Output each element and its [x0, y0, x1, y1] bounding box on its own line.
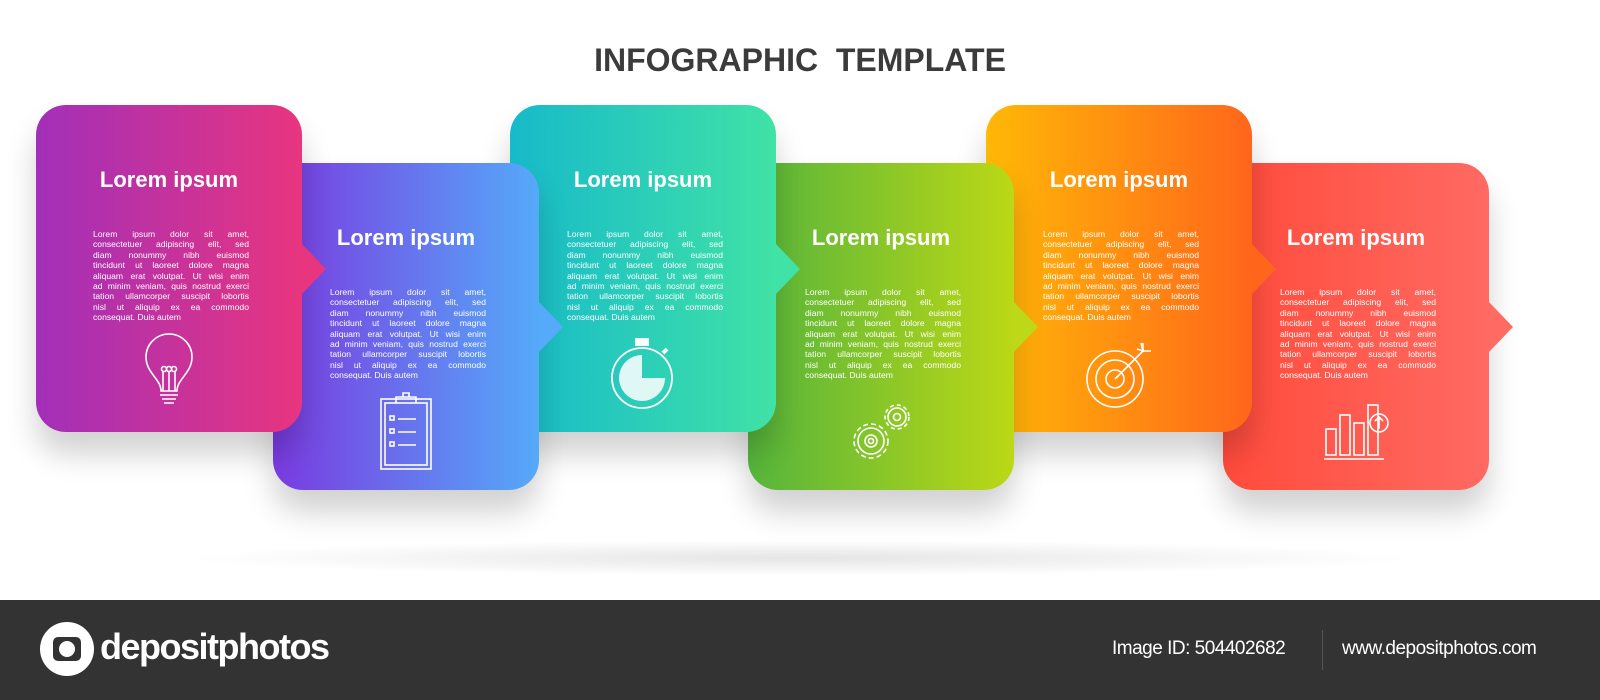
icon: bar chart: [1324, 404, 1389, 460]
text 3: ad minim veniam, quis nostrud exerci: [567, 281, 723, 291]
panel: card 4: [748, 163, 1014, 490]
footer logo text: depositphotos: [100, 626, 328, 667]
heading 5: Lorem ipsum: [1050, 167, 1188, 192]
text 6: [1280, 287, 1436, 380]
text 4: consectetuer adipiscing elit, sed: [805, 297, 961, 307]
text 6: ad minim veniam, quis nostrud exerci: [1280, 339, 1436, 349]
text 4: nisl ut aliquip ex ea commodo: [805, 360, 961, 370]
text 3: consectetuer adipiscing elit, sed: [567, 239, 723, 249]
heading 4: Lorem ipsum: [812, 225, 950, 250]
text 2: consequat. Duis autem: [330, 370, 418, 380]
text 3: aliquam erat volutpat. Ut wisi enim: [567, 271, 723, 281]
text 3: consequat. Duis autem: [567, 312, 655, 322]
panel: card 5: [986, 105, 1252, 432]
text 3: Lorem ipsum dolor sit amet,: [567, 229, 723, 239]
text 4: diam nonummy nibh euismod: [805, 308, 961, 318]
panel: card 3: [510, 105, 776, 432]
panel: card 2: [273, 163, 539, 490]
heading 3: Lorem ipsum: [574, 167, 712, 192]
text 3: nisl ut aliquip ex ea commodo: [567, 302, 723, 312]
panel: card 1: [36, 105, 302, 432]
text 2: aliquam erat volutpat. Ut wisi enim: [330, 329, 486, 339]
footer logo icon: [40, 622, 94, 676]
text 4: consequat. Duis autem: [805, 370, 893, 380]
text 5: diam nonummy nibh euismod: [1043, 250, 1199, 260]
text 1: consequat. Duis autem: [93, 312, 181, 322]
text 6: consequat. Duis autem: [1280, 370, 1368, 380]
text 4: ad minim veniam, quis nostrud exerci: [805, 339, 961, 349]
text 1: Lorem ipsum dolor sit amet,: [93, 229, 249, 239]
text 5: [1043, 229, 1200, 322]
arrow 2: [538, 301, 563, 353]
heading 2: Lorem ipsum: [337, 225, 475, 250]
text 6: aliquam erat volutpat. Ut wisi enim: [1280, 329, 1436, 339]
text 2: ad minim veniam, quis nostrud exerci: [330, 339, 486, 349]
text 6: consectetuer adipiscing elit, sed: [1280, 297, 1436, 307]
text 6: nisl ut aliquip ex ea commodo: [1280, 360, 1436, 370]
panel: card 6: [1223, 163, 1489, 490]
text 2: [330, 287, 486, 380]
text 1: nisl ut aliquip ex ea commodo: [93, 302, 249, 312]
text 3: tincidunt ut laoreet dolore magna: [567, 260, 723, 270]
text 4: tincidunt ut laoreet dolore magna: [805, 318, 961, 328]
text 5: aliquam erat volutpat. Ut wisi enim: [1043, 271, 1199, 281]
text 6: Lorem ipsum dolor sit amet,: [1280, 287, 1436, 297]
text 2: tincidunt ut laoreet dolore magna: [330, 318, 486, 328]
text 5: consequat. Duis autem: [1043, 312, 1131, 322]
website: www.depositphotos.com: [1342, 638, 1536, 659]
arrow 3: [775, 243, 800, 295]
text 1: aliquam erat volutpat. Ut wisi enim: [93, 271, 249, 281]
arrow 1: [301, 243, 326, 295]
text 1: ad minim veniam, quis nostrud exerci: [93, 281, 249, 291]
text 4: Lorem ipsum dolor sit amet,: [805, 287, 961, 297]
text 2: Lorem ipsum dolor sit amet,: [330, 287, 486, 297]
text 1: tincidunt ut laoreet dolore magna: [93, 260, 249, 270]
arrow 5: [1251, 243, 1276, 295]
text 3: [567, 229, 724, 322]
text 4: [805, 287, 962, 380]
arrow 6: [1488, 301, 1513, 353]
image id: Image ID: 504402682: [1112, 638, 1285, 659]
icon: gears: [853, 404, 910, 459]
footer bar: [0, 600, 1600, 700]
text 2: nisl ut aliquip ex ea commodo: [330, 360, 486, 370]
text 2: diam nonummy nibh euismod: [330, 308, 486, 318]
text 3: tation ullamcorper suscipit lobortis: [567, 291, 723, 301]
icon: clipboard: [380, 392, 432, 470]
icon: light bulb: [145, 333, 193, 404]
icon: stopwatch: [611, 338, 673, 409]
text 4: aliquam erat volutpat. Ut wisi enim: [805, 329, 961, 339]
text 5: ad minim veniam, quis nostrud exerci: [1043, 281, 1199, 291]
text 6: tation ullamcorper suscipit lobortis: [1280, 349, 1436, 359]
arrow 4: [1013, 301, 1038, 353]
text 5: Lorem ipsum dolor sit amet,: [1043, 229, 1199, 239]
text 5: nisl ut aliquip ex ea commodo: [1043, 302, 1199, 312]
text 1: [93, 229, 250, 322]
text 6: tincidunt ut laoreet dolore magna: [1280, 318, 1436, 328]
text 5: tation ullamcorper suscipit lobortis: [1043, 291, 1199, 301]
text 4: tation ullamcorper suscipit lobortis: [805, 349, 961, 359]
text 2: consectetuer adipiscing elit, sed: [330, 297, 486, 307]
heading 1: Lorem ipsum: [100, 167, 238, 192]
text 5: consectetuer adipiscing elit, sed: [1043, 239, 1199, 249]
text 1: consectetuer adipiscing elit, sed: [93, 239, 249, 249]
icon: target: [1086, 342, 1151, 408]
text 1: diam nonummy nibh euismod: [93, 250, 249, 260]
text 2: tation ullamcorper suscipit lobortis: [330, 349, 486, 359]
divider: [1322, 630, 1323, 670]
background shadow band: [180, 540, 1420, 576]
text 1: tation ullamcorper suscipit lobortis: [93, 291, 249, 301]
title: INFOGRAPHIC TEMPLATE: [594, 42, 1006, 78]
heading 6: Lorem ipsum: [1287, 225, 1425, 250]
text 3: diam nonummy nibh euismod: [567, 250, 723, 260]
text 6: diam nonummy nibh euismod: [1280, 308, 1436, 318]
text 5: tincidunt ut laoreet dolore magna: [1043, 260, 1199, 270]
